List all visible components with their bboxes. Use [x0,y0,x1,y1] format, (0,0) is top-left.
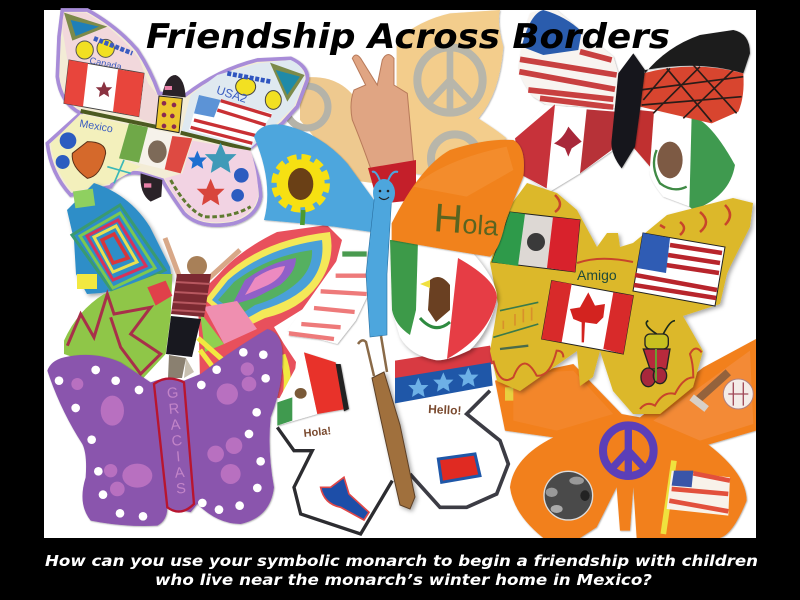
caption [45,552,758,589]
butterfly: rainbow stripe wing [198,225,342,400]
butterfly: purple Gracias: GRACIAS [164,385,190,498]
lattice wing [640,65,744,123]
flag: crayon stars and stripes [663,461,730,534]
outline: right wing [410,391,508,507]
icon: purple peace sign [603,425,654,476]
flag: Canada [542,281,633,354]
bug body [366,192,392,337]
wristband [368,160,416,204]
flag: Canada [64,60,144,117]
lower right wing patches [165,141,258,222]
title: Friendship Across Borders [146,17,670,57]
butterfly: purple Gracias [47,329,282,526]
butterfly: yellow flags Amigo [490,183,753,414]
butterfly: white with crochet hook body [277,336,508,534]
panel: white collage background [44,10,756,538]
butterfly: green and blue spiral wings [64,183,172,381]
icon: black crayon ball [544,471,593,520]
caption: How can you use your symbolic monarch to begin a friendship with children [45,552,758,570]
wing: blue upper with sunflower [254,124,381,233]
photo: hand making peace sign [351,55,414,168]
flag: USA [189,95,272,147]
outline: left wing [277,427,392,534]
label: Hola: Hola [432,196,501,245]
small bug and squiggles [493,302,702,409]
wing: Mexican flag [390,240,497,360]
label: Hola!: Hola! [303,425,332,440]
butterfly: multi-flag top left: Canada [89,56,123,72]
flag: USA [633,233,725,306]
stars band [395,346,493,403]
label: Amigo: Amigo [577,267,617,283]
flag: Mexico wing [633,110,735,210]
butterfly: American, Canadian and Mexican flag wings [515,10,750,210]
caption: who live near the monarch’s winter home in Mexico? [155,571,652,589]
butterfly: blue with sunflower and Mexican wing [254,55,524,360]
butterfly: multi-flag top left: Mexico [78,118,114,135]
red doodles on top wings [555,195,730,235]
wing: lower white with pink stripes [287,251,367,344]
butterfly: tan with grey peace signs [286,10,507,185]
photo: child standing with arms raised [165,238,240,378]
flag: Canada wing [515,104,617,192]
wing: orange Hola [392,140,524,257]
butterfly: multi-flag top left [47,10,307,225]
icon: red rectangle [438,454,480,482]
flag: Mexico small [277,352,349,426]
crochet hook body [372,372,415,509]
bug head [372,172,398,207]
icon: blue tulip [321,477,369,520]
flag: Mexico [119,123,192,173]
butterfly: multi-flag top left: USA2 [215,83,249,106]
flag: Mexico [492,212,580,272]
label: Hello!: Hello! [428,402,462,418]
hook wires [358,336,387,376]
butterfly: orange crayon with peace sign [495,339,756,538]
body patch with dots [156,75,186,133]
icon: sunflower [275,158,326,209]
